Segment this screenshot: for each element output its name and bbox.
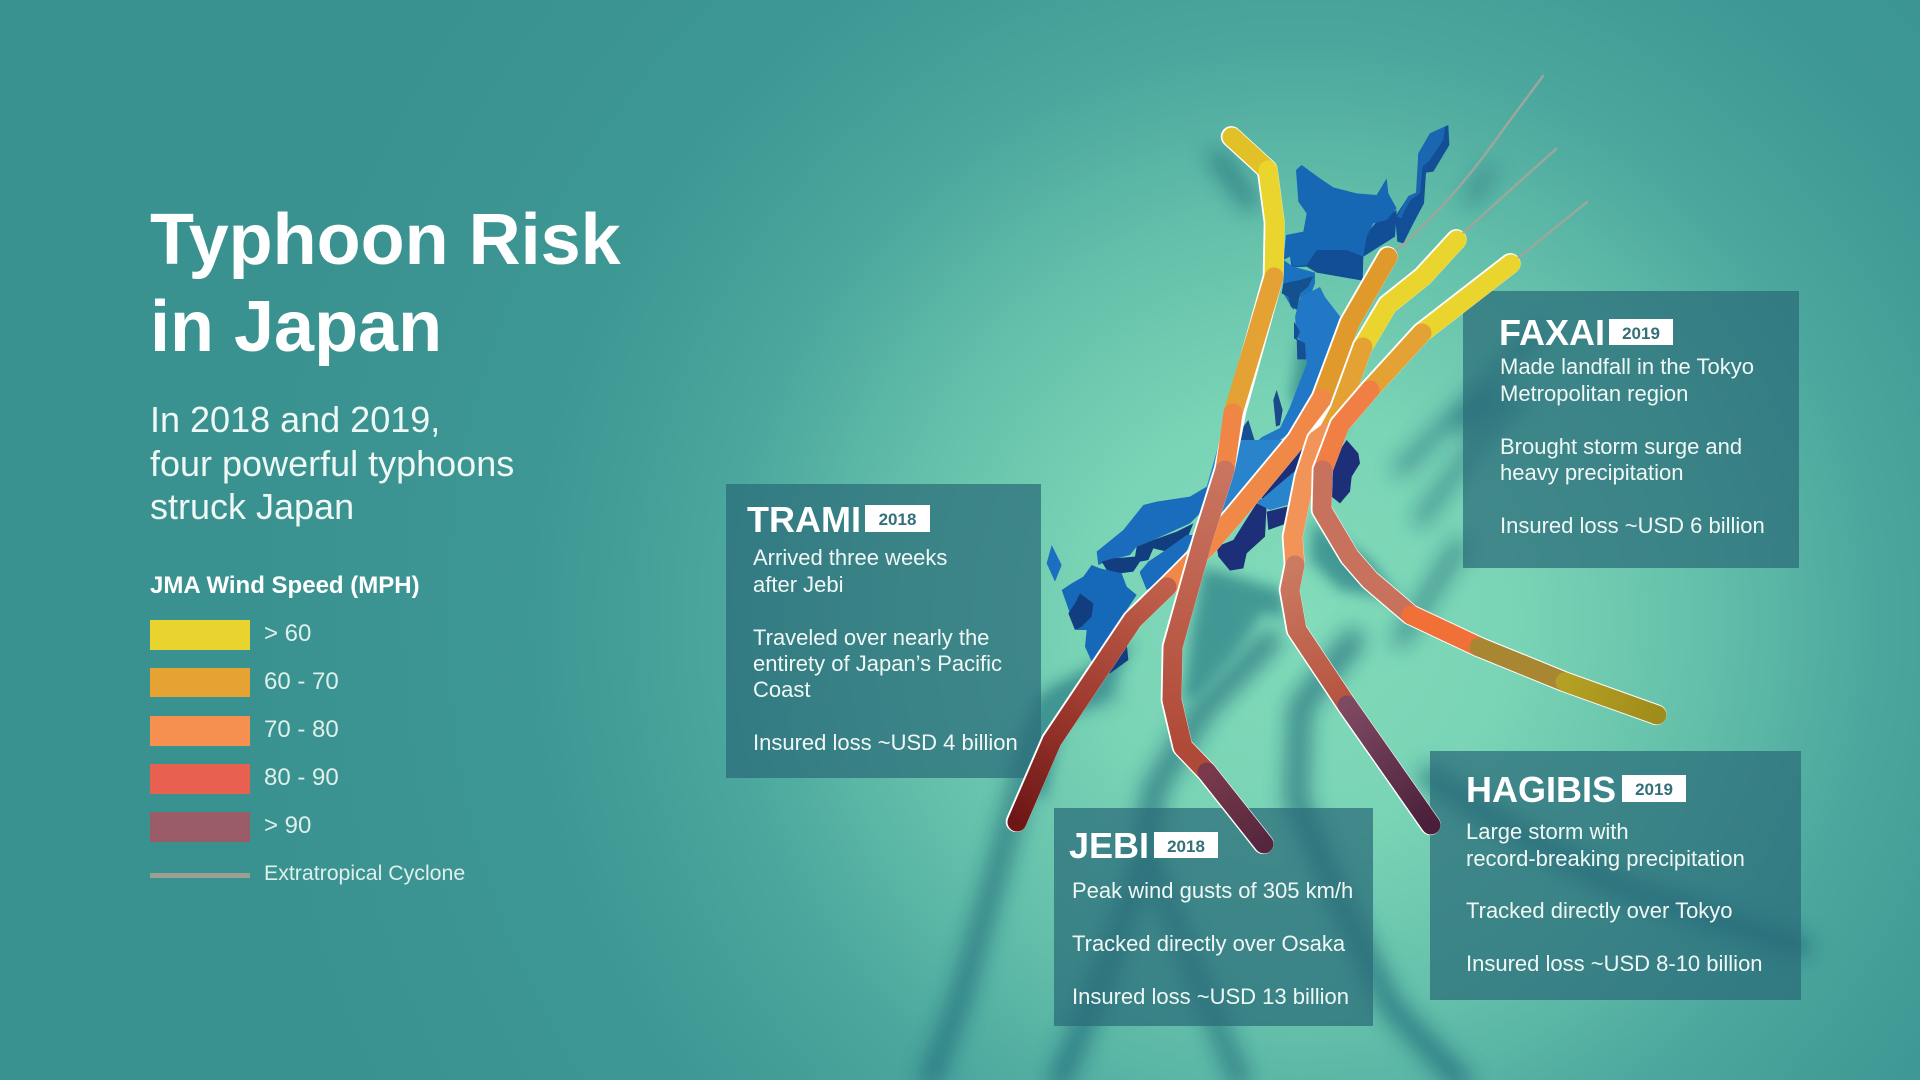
text: Trami: entirety of Japan’s Pacific	[753, 651, 1002, 676]
legend item: extratropical cyclone	[150, 861, 465, 885]
title: Typhoon Risk	[150, 200, 622, 280]
text: Jebi: 2018	[1167, 837, 1205, 856]
subtitle: four powerful typhoons	[150, 443, 514, 484]
track: Trami	[1016, 76, 1543, 822]
legend item: 60-70	[150, 668, 339, 697]
track: Hagibis	[1289, 149, 1556, 825]
text: Faxai	[1499, 312, 1765, 538]
track: Faxai	[1321, 202, 1657, 715]
text: Faxai: 2019	[1622, 324, 1660, 343]
text: Jebi: Peak wind gusts of 305 km/h	[1072, 878, 1353, 903]
track: Jebi	[1171, 137, 1275, 844]
legend item: over 60: > 60	[264, 620, 311, 647]
text: Trami: after Jebi	[753, 572, 844, 597]
legend item: extratropical cyclone: Extratropical Cyclone	[264, 861, 465, 885]
text: Faxai: Made landfall in the Tokyo	[1500, 354, 1754, 379]
text: Jebi: Insured loss ~USD 13 billion	[1072, 984, 1349, 1009]
text: Hagibis: 2019	[1635, 780, 1673, 799]
title: in Japan	[150, 287, 442, 367]
legend item: 80-90: 80 - 90	[264, 764, 339, 791]
text: Faxai: Insured loss ~USD 6 billion	[1500, 513, 1765, 538]
text: Faxai: Brought storm surge and	[1500, 434, 1742, 459]
text: Trami: Coast	[753, 677, 810, 702]
text: Jebi: Tracked directly over Osaka	[1072, 931, 1346, 956]
text: Trami	[747, 499, 1018, 755]
panel: Hagibis	[1430, 751, 1801, 1000]
legend heading: JMA Wind Speed (MPH)	[150, 572, 420, 599]
text: Trami: Arrived three weeks	[753, 545, 947, 570]
legend item: 60-70: 60 - 70	[264, 668, 339, 695]
text: Hagibis: Insured loss ~USD 8-10 billion	[1466, 951, 1763, 976]
text: Jebi	[1069, 825, 1353, 1009]
cast shadows of tracks and map	[930, 157, 1800, 1080]
text: Faxai: Metropolitan region	[1500, 381, 1688, 406]
text: Hagibis: record-breaking precipitation	[1466, 846, 1745, 871]
legend item: over 90	[150, 812, 311, 842]
legend	[150, 572, 465, 885]
text: Hagibis: HAGIBIS	[1466, 769, 1616, 810]
legend item: 70-80: 70 - 80	[264, 716, 339, 743]
text: Jebi: JEBI	[1069, 825, 1149, 866]
panel: Trami	[726, 484, 1041, 778]
legend item: 70-80	[150, 716, 339, 746]
text: Hagibis: Large storm with	[1466, 819, 1629, 844]
legend item: 80-90	[150, 764, 339, 794]
panel: Jebi	[1054, 808, 1373, 1026]
subtitle: In 2018 and 2019,	[150, 399, 440, 440]
map of Japan	[1047, 125, 1449, 673]
text: Trami: 2018	[879, 510, 916, 529]
legend item: over 90: > 90	[264, 812, 311, 839]
subtitle: struck Japan	[150, 486, 354, 527]
text: Faxai: heavy precipitation	[1500, 460, 1683, 485]
text: Trami: TRAMI	[747, 499, 861, 540]
text: Hagibis: Tracked directly over Tokyo	[1466, 898, 1733, 923]
legend item: over 60	[150, 620, 311, 650]
text: Trami: Insured loss ~USD 4 billion	[753, 730, 1018, 755]
text: Trami: Traveled over nearly the	[753, 625, 989, 650]
text: Hagibis	[1466, 769, 1763, 976]
panel: Faxai	[1463, 291, 1799, 568]
text: Faxai: FAXAI	[1499, 312, 1605, 353]
